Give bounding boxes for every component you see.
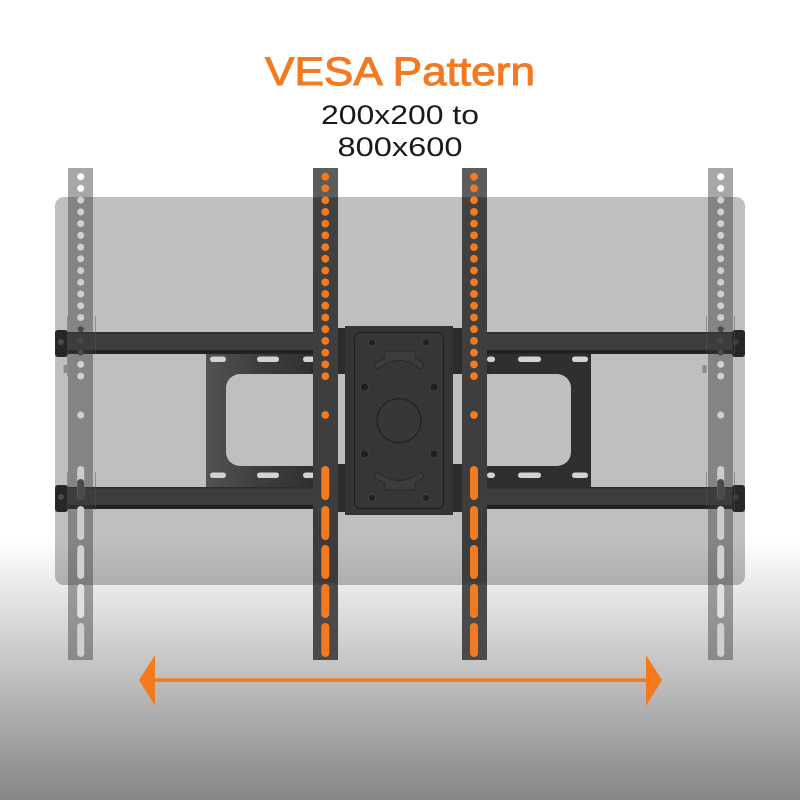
subtitle: 800x600 [338,132,462,162]
double-headed arrow [139,655,662,706]
center wall plate [345,326,453,515]
upper arc slot [374,351,424,369]
center-left orange rail [313,168,338,660]
subtitle [321,100,479,162]
center-right orange rail [462,168,487,660]
right ghost rail [702,168,734,660]
panel: TV screen silhouette [55,197,745,585]
mounting plate right [480,354,591,487]
plate bolts [360,339,438,501]
upper horizontal arm [55,330,745,357]
rail side brackets [310,328,490,512]
mounting plate left [206,354,320,487]
lower arc slot [374,472,424,490]
circular pivot [377,399,421,443]
left ghost rail [64,168,96,660]
lower horizontal arm [55,485,745,512]
small side screw [64,365,68,373]
subtitle: 200x200 to [321,100,479,130]
title: VESA Pattern [265,50,535,94]
small side screw [702,365,706,373]
